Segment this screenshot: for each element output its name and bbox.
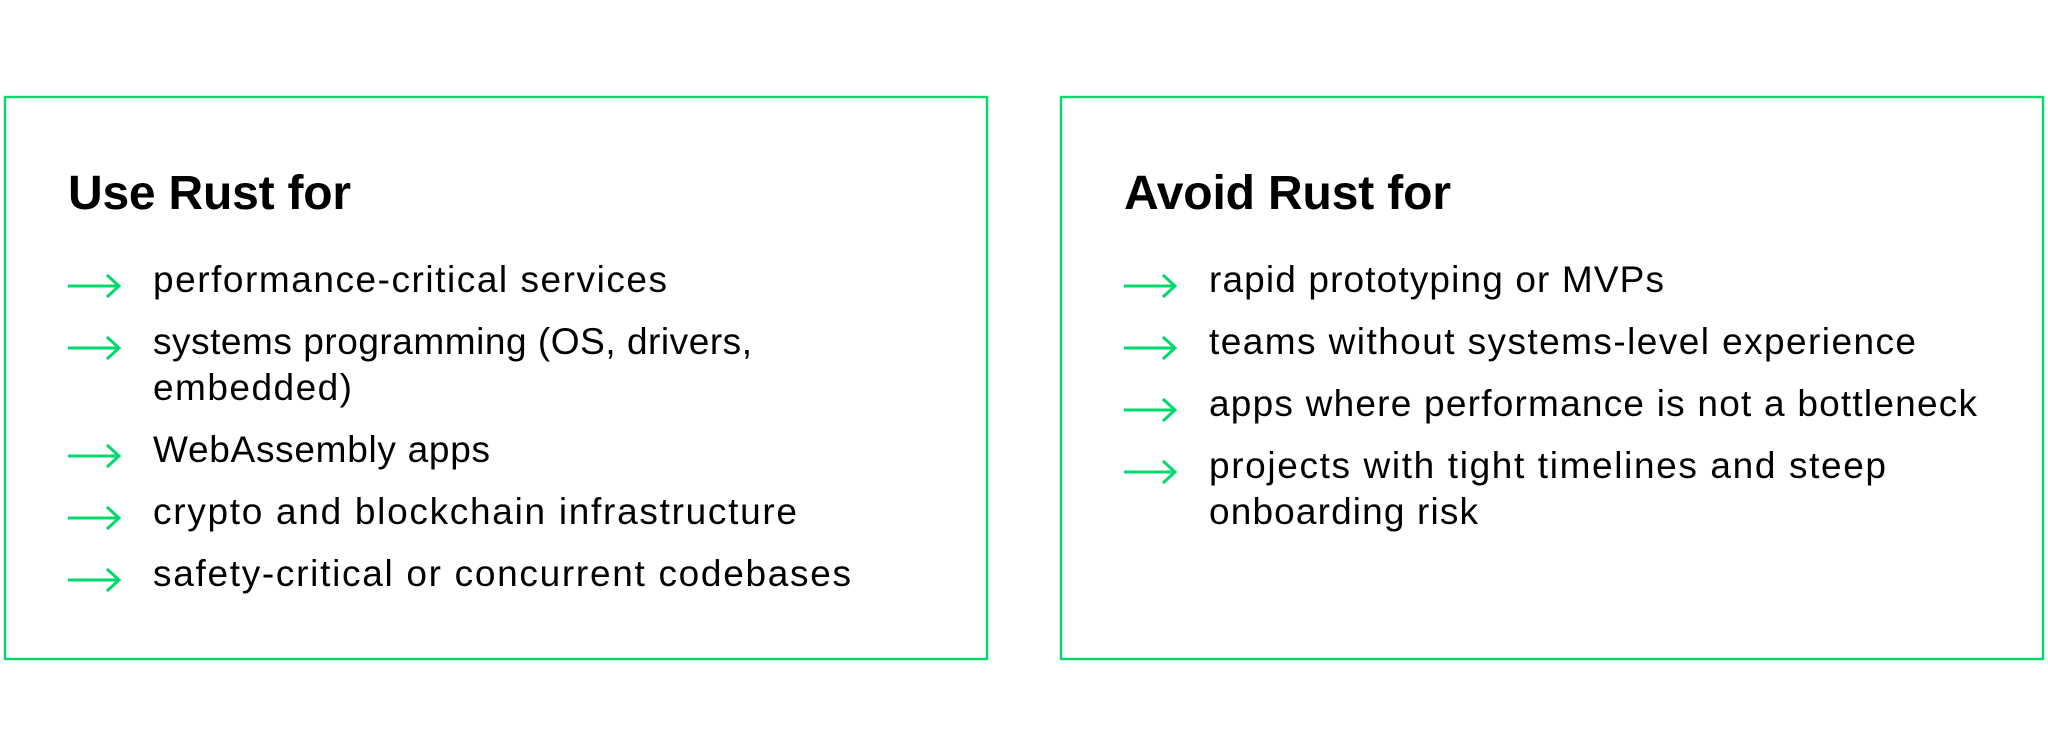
list item: safety-critical or concurrent codebases: safety-critical or concurrent codebases (153, 553, 851, 594)
heading: use Rust for: Use Rust for (68, 167, 351, 220)
list item: teams without systems-level experience: teams without systems-level experience (1209, 321, 1916, 362)
list item: projects with tight timelines (1124, 445, 1886, 532)
list item: systems programming: systems programming (OS, drivers, (153, 321, 752, 362)
panel border (5, 97, 987, 659)
list item: apps where performance is not a bottleneck: apps where performance is not a bottleneck (1209, 383, 1978, 424)
list item: systems programming: embedded) (153, 367, 352, 408)
list item: performance-critical services: performance-critical services (153, 259, 667, 300)
list item: systems programming (68, 321, 752, 408)
list item: WebAssembly apps: WebAssembly apps (153, 429, 490, 470)
panel: avoid Rust for (1061, 97, 2043, 659)
list item: crypto and blockchain infrastructure: crypto and blockchain infrastructure (153, 491, 797, 532)
panel: use Rust for (5, 97, 987, 659)
list item: projects with tight timelines: onboarding risk (1209, 491, 1478, 532)
panel border (1061, 97, 2043, 659)
list item: rapid prototyping or MVPs: rapid prototyping or MVPs (1209, 259, 1664, 300)
list item: projects with tight timelines: projects with tight timelines and steep (1209, 445, 1886, 486)
heading: avoid Rust for: Avoid Rust for (1124, 167, 1451, 220)
